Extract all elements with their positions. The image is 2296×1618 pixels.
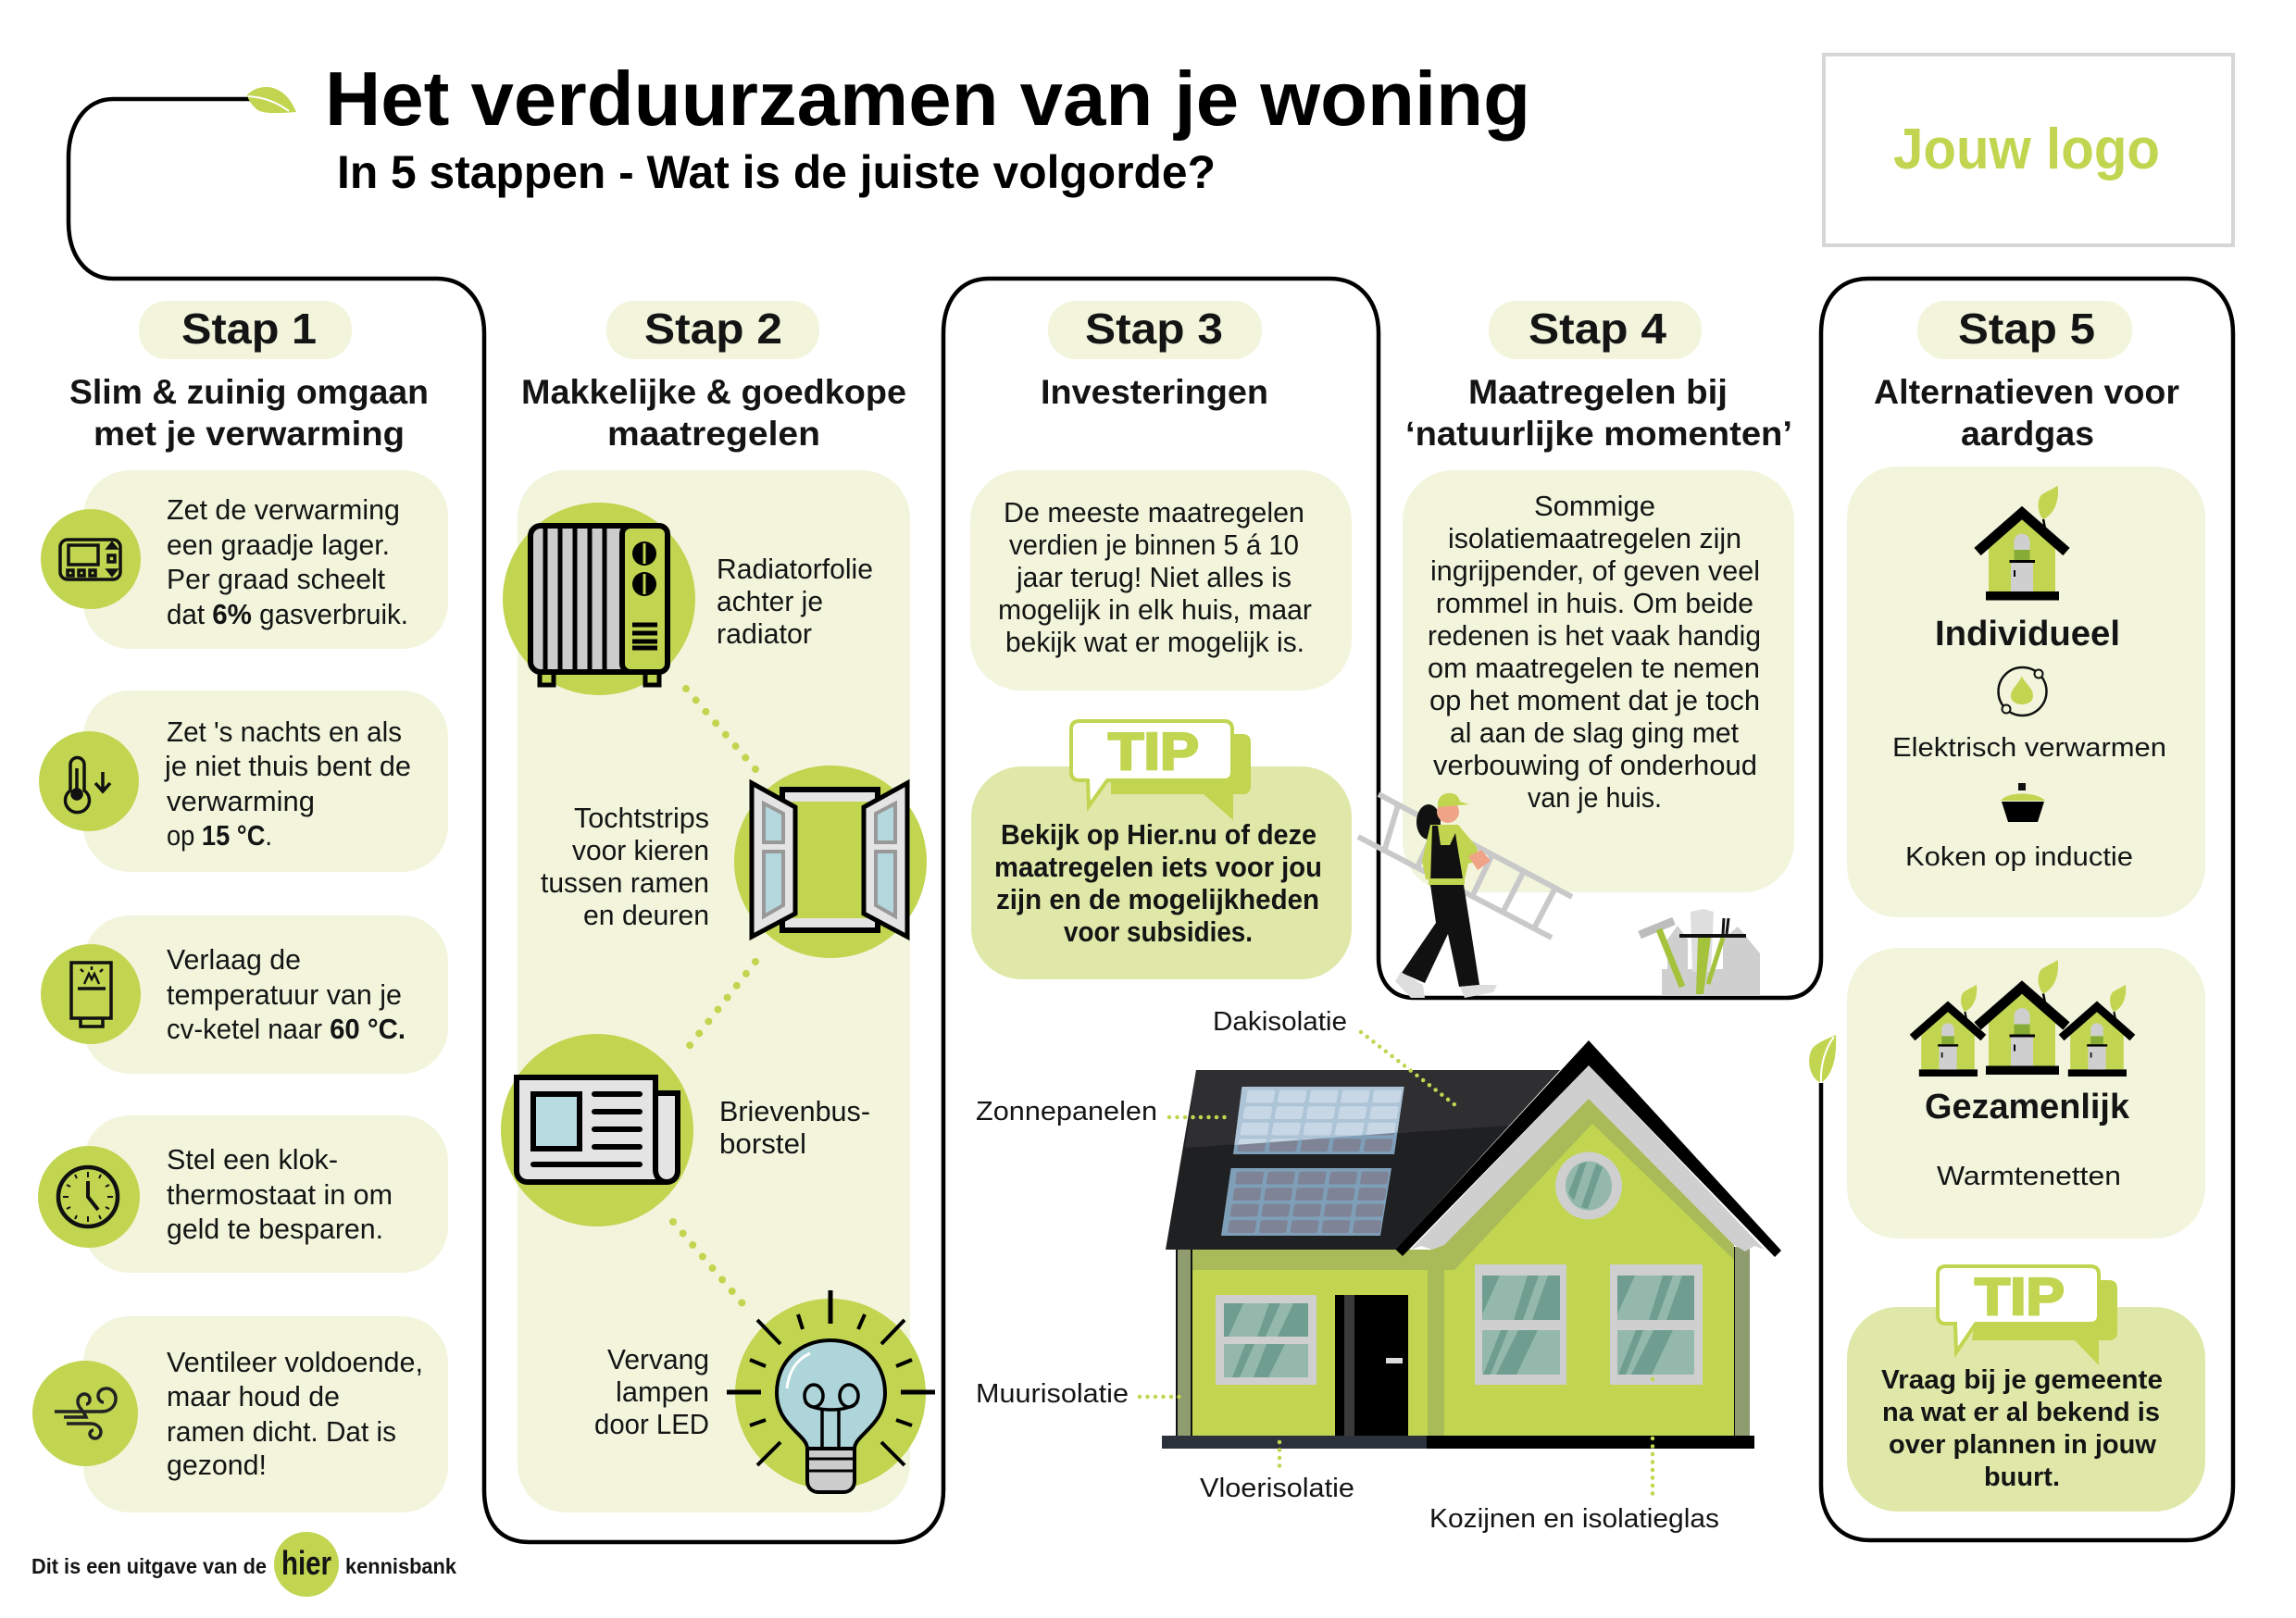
text: ventilation: maar houd de bbox=[167, 1381, 340, 1413]
step 2 heading pill bbox=[606, 301, 819, 359]
tip speech bubble bbox=[1071, 721, 1251, 820]
tip text: buurt. bbox=[1984, 1462, 2060, 1492]
card: ventilation bbox=[32, 1316, 448, 1512]
callout: tip subsidies bbox=[971, 721, 1352, 979]
title: Het verduurzamen van je woning bbox=[325, 56, 1530, 142]
text: letterbox brush bbox=[719, 1096, 870, 1160]
panel: step 1 bbox=[32, 301, 448, 1512]
card: boiler temperature bbox=[41, 915, 448, 1074]
icon: boiler bbox=[71, 963, 111, 1027]
step 1 subheading: Slim & zuinig omgaan bbox=[69, 373, 429, 411]
text: LED lamps: lampen bbox=[616, 1376, 709, 1408]
card: investments text: bekijk wat er mogelijk is. bbox=[1005, 627, 1304, 658]
text: night temperature: verwarming bbox=[167, 786, 315, 817]
step 2 subheading: maatregelen bbox=[607, 415, 820, 453]
card: natural moments text: op het moment dat je toch bbox=[1429, 685, 1760, 716]
icon: house with leaf bbox=[1978, 485, 2066, 600]
card: natural moments text: verbouwing of onderhoud bbox=[1433, 750, 1757, 781]
right windows bbox=[1475, 1264, 1703, 1385]
text: radiator foil bbox=[717, 554, 873, 650]
icon: three houses bbox=[1913, 960, 2132, 1077]
step 2 background card bbox=[518, 470, 910, 1512]
tip text: voor subsidies. bbox=[1064, 916, 1253, 948]
text: boiler temperature: temperatuur van je bbox=[167, 979, 402, 1011]
text: lower temperature bbox=[167, 494, 408, 630]
step 2 subheading bbox=[521, 373, 906, 453]
house drawing bbox=[1162, 1040, 1781, 1449]
icon: leaf at start of outline bbox=[247, 87, 296, 113]
text: boiler temperature: Verlaag de bbox=[167, 944, 301, 976]
step 3 heading pill bbox=[1048, 301, 1262, 359]
text: ventilation: ramen dicht. Dat is bbox=[167, 1416, 396, 1448]
solar panels bbox=[1221, 1087, 1404, 1236]
text: draught strips: voor kieren bbox=[572, 835, 709, 866]
tip speech bubble bbox=[1938, 1266, 2117, 1365]
text: ventilation: gezond! bbox=[167, 1450, 267, 1481]
text: draught strips: Tochtstrips bbox=[574, 803, 709, 834]
card: natural moments text: Sommige bbox=[1534, 491, 1655, 522]
icon: wind bbox=[55, 1388, 116, 1438]
step 4 subheading: ‘natuurlijke momenten’ bbox=[1405, 415, 1792, 453]
card: investments text: jaar terug! Niet alles is bbox=[1016, 562, 1292, 593]
labels: Muurisolatie bbox=[976, 1379, 1129, 1409]
illustration: worker with ladder bbox=[1358, 793, 1572, 998]
illustration: house with insulation labels bbox=[976, 1007, 1781, 1534]
step 2 heading pill: Stap 2 bbox=[644, 305, 782, 353]
card: clock thermostat bbox=[38, 1115, 448, 1273]
text: LED lamps bbox=[594, 1344, 709, 1440]
panel: step 4 bbox=[1358, 301, 1794, 998]
card: collective bbox=[1847, 948, 2205, 1238]
card: lower temperature bbox=[41, 470, 448, 649]
text: ventilation bbox=[167, 1347, 423, 1481]
step 1 heading pill bbox=[139, 301, 352, 359]
card: night temperature bbox=[39, 691, 448, 872]
step 4 subheading bbox=[1405, 373, 1792, 453]
logo placeholder: Jouw logo bbox=[1893, 118, 2160, 181]
card: individual bbox=[1847, 467, 2205, 917]
dotted pointers bbox=[1140, 1032, 1653, 1494]
tip speech bubble: TIP bbox=[1108, 722, 1199, 781]
icon: pot bbox=[2001, 783, 2045, 822]
step 3 subheading: Investeringen bbox=[1041, 373, 1268, 411]
footer credit: hier bbox=[281, 1544, 331, 1582]
tip text bbox=[1881, 1365, 2163, 1492]
card: investments text: verdien je binnen 5 á 10 bbox=[1009, 529, 1299, 561]
logo placeholder bbox=[1824, 55, 2233, 245]
icon: radiator bbox=[530, 526, 668, 685]
text: boiler temperature: cv-ketel naar 60 °C. bbox=[167, 1014, 406, 1045]
text: night temperature: op 15 °C. bbox=[167, 820, 272, 852]
card: natural moments text: isolatiemaatregelen zijn bbox=[1448, 523, 1741, 554]
text: draught strips: en deuren bbox=[583, 900, 709, 931]
card: natural moments text bbox=[1403, 470, 1794, 892]
tip text: Bekijk op Hier.nu of deze bbox=[1001, 819, 1316, 851]
step 1 subheading: met je verwarming bbox=[94, 415, 405, 453]
text: radiator foil: Radiatorfolie bbox=[717, 554, 873, 585]
text: clock thermostat bbox=[167, 1144, 393, 1245]
subtitle: In 5 stappen - Wat is de juiste volgorde? bbox=[337, 146, 1216, 198]
tip text: over plannen in jouw bbox=[1889, 1430, 2156, 1460]
card: investments text: De meeste maatregelen bbox=[1004, 497, 1304, 529]
text: lower temperature: dat 6% gasverbruik. bbox=[167, 599, 408, 630]
icon: clock bbox=[58, 1167, 118, 1226]
step 5 subheading: aardgas bbox=[1961, 415, 2094, 453]
text: lower temperature: Zet de verwarming bbox=[167, 494, 400, 526]
item: LED lamps bbox=[594, 1290, 935, 1492]
step 5 subheading bbox=[1874, 373, 2179, 453]
tip text: zijn en de mogelijkheden bbox=[996, 884, 1319, 915]
item: draught strips bbox=[541, 765, 927, 958]
footer credit bbox=[31, 1532, 456, 1597]
text: draught strips: tussen ramen bbox=[541, 867, 709, 899]
step 4 subheading: Maatregelen bij bbox=[1468, 373, 1728, 411]
card: natural moments text: redenen is het vaak handig bbox=[1428, 620, 1761, 652]
labels: Zonnepanelen bbox=[976, 1097, 1157, 1126]
step 1 subheading bbox=[69, 373, 429, 453]
text: clock thermostat: thermostaat in om bbox=[167, 1179, 393, 1211]
labels: Kozijnen en isolatieglas bbox=[1429, 1504, 1719, 1534]
icon: newspaper bbox=[517, 1077, 678, 1182]
left window bbox=[1216, 1295, 1316, 1385]
text: lower temperature: een graadje lager. bbox=[167, 529, 390, 561]
card: natural moments text: van je huis. bbox=[1528, 782, 1662, 814]
text: lower temperature: Per graad scheelt bbox=[167, 564, 386, 595]
text: clock thermostat: Stel een klok- bbox=[167, 1144, 338, 1176]
step 5 heading pill bbox=[1917, 301, 2132, 359]
labels: Dakisolatie bbox=[1213, 1007, 1347, 1037]
item: radiator foil bbox=[503, 503, 873, 695]
card: natural moments text: ingrijpender, of geven veel bbox=[1430, 555, 1760, 587]
text: night temperature bbox=[164, 716, 411, 852]
tip text: Vraag bij je gemeente bbox=[1881, 1365, 2163, 1395]
label: heat networks: Warmtenetten bbox=[1937, 1162, 2121, 1191]
label: induction: Koken op inductie bbox=[1905, 842, 2133, 872]
text: clock thermostat: geld te besparen. bbox=[167, 1214, 383, 1245]
tip text: maatregelen iets voor jou bbox=[994, 852, 1322, 883]
text: night temperature: je niet thuis bent de bbox=[164, 751, 411, 782]
labels: Vloerisolatie bbox=[1200, 1474, 1354, 1503]
step 3 heading pill: Stap 3 bbox=[1085, 305, 1223, 353]
panel: step 2 bbox=[501, 301, 935, 1512]
footer credit: kennisbank bbox=[345, 1554, 456, 1578]
text: boiler temperature bbox=[167, 944, 406, 1045]
icon: leaf on step 5 outline bbox=[1809, 1035, 1836, 1083]
item: letterbox brush bbox=[501, 1034, 870, 1226]
step 2 subheading: Makkelijke & goedkope bbox=[521, 373, 906, 411]
step 1 heading pill: Stap 1 bbox=[181, 305, 317, 353]
icon: thermometer with arrow bbox=[66, 758, 110, 813]
card: natural moments text: al aan de slag ging met bbox=[1450, 717, 1740, 749]
icon: thermostat bbox=[60, 540, 120, 579]
icon: light bulb bbox=[727, 1290, 935, 1492]
label: electric heating: Elektrisch verwarmen bbox=[1892, 733, 2166, 763]
text: radiator foil: radiator bbox=[717, 618, 812, 650]
step 5 heading pill: Stap 5 bbox=[1958, 305, 2095, 353]
step 5 subheading: Alternatieven voor bbox=[1874, 373, 2179, 411]
icon: open window bbox=[752, 783, 907, 937]
footer credit: Dit is een uitgave van de bbox=[31, 1554, 267, 1578]
front door bbox=[1335, 1295, 1408, 1436]
tip speech bubble: TIP bbox=[1975, 1267, 2065, 1326]
icon: electric heating bbox=[1998, 667, 2046, 716]
labels bbox=[976, 1007, 1719, 1534]
text: LED lamps: Vervang bbox=[607, 1344, 709, 1375]
text: radiator foil: achter je bbox=[717, 586, 823, 617]
heading: individual: Individueel bbox=[1935, 615, 2120, 653]
tip text: na wat er al bekend is bbox=[1882, 1398, 2160, 1427]
card: natural moments text: om maatregelen te nemen bbox=[1428, 653, 1760, 684]
callout: tip municipality bbox=[1847, 1266, 2205, 1512]
card: investments text bbox=[970, 470, 1352, 691]
text: letterbox brush: Brievenbus- bbox=[719, 1096, 870, 1127]
text: LED lamps: door LED bbox=[594, 1409, 709, 1440]
text: night temperature: Zet 's nachts en als bbox=[167, 716, 402, 748]
card: natural moments text: rommel in huis. Om beide bbox=[1436, 588, 1753, 619]
step 4 heading pill bbox=[1489, 301, 1702, 359]
dotted connectors bbox=[673, 689, 755, 1308]
tip text bbox=[994, 819, 1322, 948]
panel: step 5 bbox=[1847, 301, 2205, 1512]
illustration: toolbox bbox=[1640, 909, 1760, 996]
text: letterbox brush: borstel bbox=[719, 1128, 806, 1160]
step 4 heading pill: Stap 4 bbox=[1529, 305, 1666, 353]
heading: collective: Gezamenlijk bbox=[1925, 1088, 2130, 1126]
card: investments text: mogelijk in elk huis, maar bbox=[998, 594, 1312, 626]
panel: step 3 bbox=[970, 301, 1352, 979]
text: ventilation: Ventileer voldoende, bbox=[167, 1347, 423, 1378]
text: draught strips bbox=[541, 803, 709, 931]
